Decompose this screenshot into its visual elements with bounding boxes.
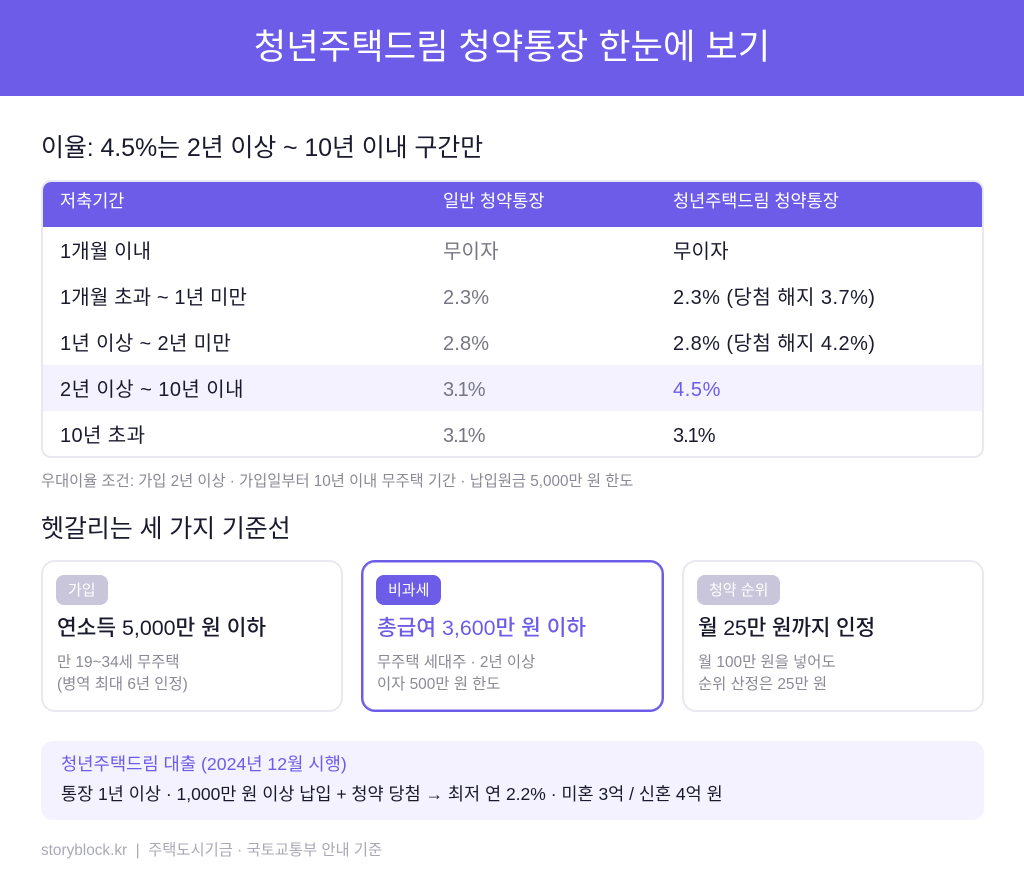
row: 1 to 2 years (60, 333, 875, 355)
heading: three thresholds: 헷갈리는 세 가지 기준선 (41, 515, 291, 543)
row: 1 to 2 years: 2.8% (443, 333, 489, 355)
card detail (377, 654, 535, 693)
row: 1 to 2 years: 2.8% (당첨 해지 4.2%) (673, 333, 875, 355)
card detail: 이자 500만 원 한도 (377, 676, 500, 693)
row: 2 to 10 years highlighted: 3.1% (443, 379, 485, 401)
card: subscription rank (682, 560, 984, 712)
header banner (0, 0, 1024, 96)
table header row (43, 182, 984, 227)
table header row: 일반 청약통장 (443, 191, 544, 211)
tag: tax free (376, 575, 441, 605)
tag: tax free: 비과세 (388, 582, 429, 599)
row: 1 month to 1 year (60, 287, 875, 309)
row: over 10 years (60, 425, 715, 447)
card detail: 만 19~34세 무주택 (57, 654, 180, 671)
tag: join: 가입 (68, 582, 96, 599)
callout body: 통장 1년 이상 · 1,000만 원 이상 납입 + 청약 당첨 → 최저 연 2.2% · 미혼 3억 / 신혼 4억 원 (61, 784, 723, 804)
tag: join (56, 575, 108, 605)
footer source: storyblock.kr | 주택도시기금 · 국토교통부 안내 기준 (41, 842, 382, 859)
row: 1 month to 1 year: 1개월 초과 ~ 1년 미만 (60, 287, 247, 309)
card heading: 연소득 5,000만 원 이하 (57, 616, 266, 640)
row: 1 month to 1 year: 2.3% (당첨 해지 3.7%) (673, 287, 875, 309)
card detail (57, 654, 188, 693)
table footnote: 우대이율 조건: 가입 2년 이상 · 가입일부터 10년 이내 무주택 기간 · 납입원금 5,000만 원 한도 (41, 473, 633, 490)
card detail: 순위 산정은 25만 원 (698, 676, 827, 693)
row: 1 month to 1 year: 2.3% (443, 287, 489, 309)
tag: rank: 청약 순위 (709, 582, 768, 599)
card detail (698, 654, 836, 693)
row: up to 1 month: 무이자 (443, 241, 499, 263)
table header row: 청년주택드림 청약통장 (673, 191, 839, 211)
card: tax exemption highlighted (361, 560, 664, 712)
callout: loan (41, 741, 984, 820)
card heading: 총급여 3,600만 원 이하 (377, 616, 586, 640)
panel: interest rate table (41, 180, 984, 458)
row: up to 1 month: 1개월 이내 (60, 241, 151, 263)
tag: rank (697, 575, 780, 605)
card: subscription income (41, 560, 343, 712)
card heading: 월 25만 원까지 인정 (698, 616, 875, 640)
row: up to 1 month: 무이자 (673, 241, 729, 263)
title: 청년주택드림 청약통장 한눈에 보기 (254, 28, 770, 67)
card detail: 월 100만 원을 넣어도 (698, 654, 836, 671)
heading: interest rate: 이율: 4.5%는 2년 이상 ~ 10년 이내 구간만 (41, 134, 483, 162)
card detail: 무주택 세대주 · 2년 이상 (377, 654, 535, 671)
table header row: 저축기간 (60, 191, 124, 211)
row: over 10 years: 10년 초과 (60, 425, 145, 447)
row: up to 1 month (60, 241, 729, 263)
card detail: (병역 최대 6년 인정) (57, 676, 188, 693)
row: 2 to 10 years highlighted: 4.5% (673, 379, 721, 401)
row: 2 to 10 years highlighted: 2년 이상 ~ 10년 이내 (60, 379, 244, 401)
row: over 10 years: 3.1% (443, 425, 485, 447)
row: 1 to 2 years: 1년 이상 ~ 2년 미만 (60, 333, 231, 355)
row: over 10 years: 3.1% (673, 425, 715, 447)
row: 2 to 10 years highlighted (43, 365, 984, 411)
callout heading: 청년주택드림 대출 (2024년 12월 시행) (61, 754, 347, 774)
